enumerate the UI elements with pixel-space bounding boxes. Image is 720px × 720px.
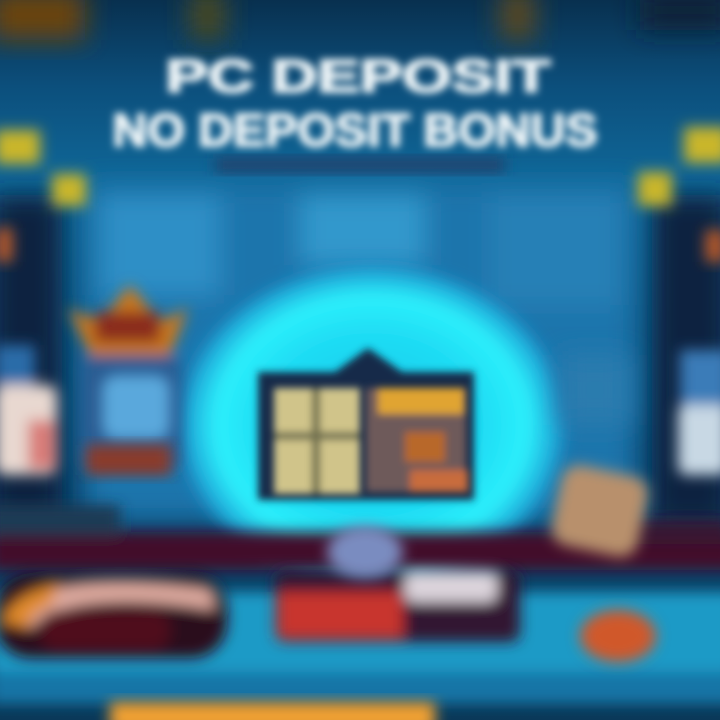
cyan glow [172, 260, 572, 590]
bottom orange light [110, 702, 435, 720]
monitor [258, 348, 474, 500]
title [112, 50, 598, 156]
icon: left cards [0, 345, 57, 475]
icon: crown and slot machine [68, 285, 188, 475]
teal table surface [0, 592, 720, 704]
text block: right of monitor [560, 355, 630, 425]
left table tray [0, 574, 227, 658]
maroon table band [0, 505, 720, 570]
monitor right screen [366, 388, 468, 492]
monitor frame [258, 348, 474, 500]
top decorations [0, 0, 720, 40]
icon: red chip [580, 610, 656, 662]
title: PC DEPOSIT [166, 50, 550, 102]
icons: yellow coins [0, 127, 720, 206]
title: NO DEPOSIT BONUS [112, 104, 598, 156]
icon: chip right [548, 462, 651, 560]
icon: center dome [327, 526, 403, 578]
panel: central blue board [85, 185, 635, 520]
subtitle [215, 158, 505, 172]
monitor left screen [274, 388, 360, 494]
center table tray [275, 570, 520, 642]
icon: right cards [678, 350, 720, 475]
side dark columns [0, 195, 720, 525]
icons: side orange lights [0, 228, 720, 262]
